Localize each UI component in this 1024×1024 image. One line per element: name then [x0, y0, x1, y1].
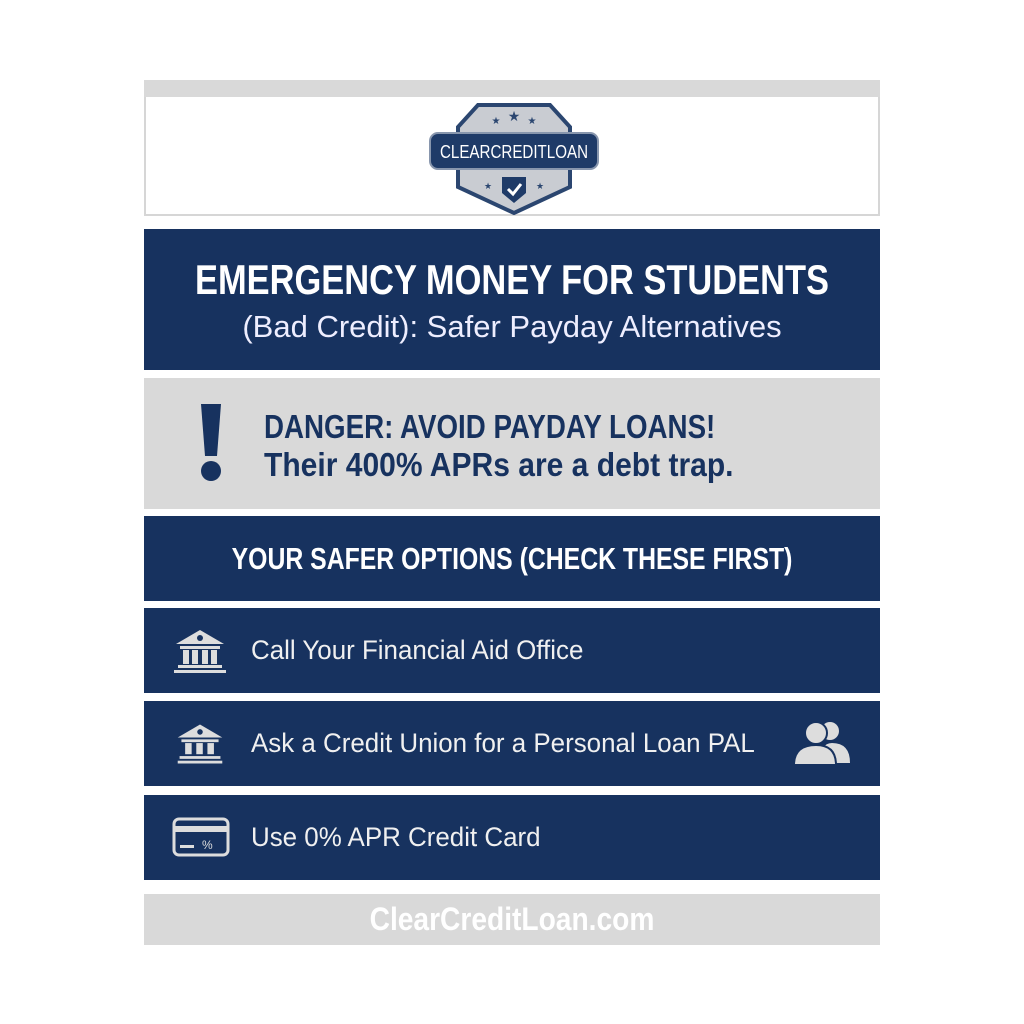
- logo badge: [429, 103, 599, 215]
- icon: bank: [178, 724, 222, 764]
- option 2: Ask a Credit Union for a Personal Loan PAL: [251, 728, 755, 758]
- footer: [144, 894, 880, 945]
- footer: ClearCreditLoan.com: [370, 901, 654, 937]
- icon: bank: [174, 630, 226, 673]
- options header: [144, 516, 880, 601]
- logo badge: ★: [492, 116, 501, 127]
- icon: exclamation: [201, 404, 221, 481]
- option 3: Use 0% APR Credit Card: [251, 822, 541, 852]
- logo panel: [144, 97, 880, 216]
- option 1: Call Your Financial Aid Office: [251, 635, 583, 665]
- subtitle: (Bad Credit): Safer Payday Alternatives: [242, 309, 782, 344]
- icon: people: [795, 722, 850, 764]
- icon: credit card: [172, 818, 230, 856]
- option 2: [144, 701, 880, 786]
- option 1: [144, 608, 880, 693]
- panel: danger warning: [144, 378, 880, 509]
- warning text: Their 400% APRs are a debt trap.: [264, 446, 734, 483]
- icon: credit card: %: [202, 838, 213, 852]
- top strip: [144, 80, 880, 97]
- logo badge: ★: [508, 108, 520, 124]
- warning text: [264, 408, 734, 483]
- options header: YOUR SAFER OPTIONS (CHECK THESE FIRST): [232, 541, 792, 576]
- logo badge: ★: [528, 116, 537, 127]
- title panel: [144, 229, 880, 370]
- option 3: [144, 795, 880, 880]
- logo badge: ★: [536, 181, 544, 191]
- title: EMERGENCY MONEY FOR STUDENTS: [195, 256, 829, 303]
- logo badge: ★: [484, 181, 492, 191]
- warning text: DANGER: AVOID PAYDAY LOANS!: [264, 408, 715, 445]
